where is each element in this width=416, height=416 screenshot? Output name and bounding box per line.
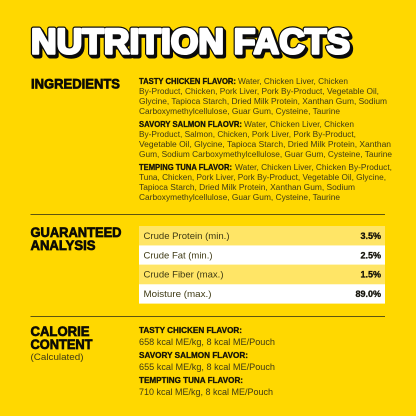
text block: tasty chicken (139, 76, 387, 116)
text block: savory salmon: Water, Chicken Liver, Chicken (244, 119, 354, 129)
row: crude protein: 3.5% (360, 231, 381, 241)
row: moisture: 89.0% (355, 289, 381, 299)
calories: tempting tuna: TEMPTING TUNA FLAVOR: (139, 375, 243, 385)
text block: tasty chicken: TASTY CHICKEN FLAVOR: (139, 76, 236, 86)
text block: temping tuna: Tapioca Starch, Dried Milk Protein, Xanthan Gum, Sodium (139, 182, 355, 192)
row: crude fat (139, 245, 385, 265)
calories: tempting tuna (139, 375, 273, 397)
row: crude fiber (139, 265, 385, 284)
title: NUTRITION FACTS (33, 25, 352, 64)
row: crude fiber: 1.5% (360, 270, 381, 280)
text block: temping tuna: Tuna, Chicken, Pork Liver, Pork By-Product, Vegetable Oil, Glycine, (139, 172, 386, 182)
text block: savory salmon: SAVORY SALMON FLAOVR: (139, 119, 242, 129)
heading: calorie content: CALORIE (30, 324, 90, 339)
text block: tasty chicken: Glycine, Tapioca Starch, Dried Milk Protein, Xanthan Gum, Sodium (139, 96, 387, 106)
text block: tasty chicken: Water, Chicken Liver, Chicken (238, 76, 348, 86)
text block: temping tuna (139, 162, 392, 202)
calories: savory salmon: 655 kcal ME/kg, 8 kcal ME/Pouch (139, 362, 275, 372)
calorie list (139, 325, 275, 397)
text block: tasty chicken: By-Product, Chicken, Pork Liver, Pork By-Product, Vegetable Oil, (139, 86, 379, 96)
heading: calorie content: (Calculated) (30, 351, 84, 362)
heading: ingredients: INGREDIENTS (31, 76, 120, 92)
row: crude protein (139, 226, 385, 245)
calories: tasty chicken (139, 325, 275, 347)
heading: guaranteed analysis: GUARANTEED (30, 225, 122, 240)
row: crude protein: Crude Protein (min.) (144, 231, 230, 241)
heading: calorie content (30, 324, 93, 362)
row: crude fat: Crude Fat (min.) (144, 250, 212, 260)
title: NUTRITION FACTS (31, 22, 350, 62)
text block: savory salmon: Vegetable Oil, Glycine, Tapioca Starch, Dried Milk Protein, Xanthan (139, 139, 391, 149)
text block: temping tuna: TEMPING TUNA FLAVOR: (139, 162, 232, 172)
heading: guaranteed analysis: ANALYSIS (30, 238, 96, 253)
calories: tasty chicken: 658 kcal ME/kg, 8 kcal ME/Pouch (139, 337, 275, 347)
row: moisture: Moisture (max.) (144, 289, 212, 299)
title: NUTRITION FACTS (31, 22, 350, 62)
calories: tempting tuna: 710 kcal ME/kg, 8 kcal ME/Pouch (139, 387, 273, 397)
row: moisture (139, 284, 385, 304)
row: crude fat: 2.5% (360, 250, 381, 260)
text block: temping tuna: Carboxymethylcellulose, Guar Gum, Cysteine, Taurine (139, 192, 340, 202)
title: NUTRITION FACTS (32, 24, 351, 63)
text block: savory salmon: Gum, Sodium Carboxymethylcellulose, Guar Gum, Cysteine, Taurine (139, 149, 392, 159)
text block: tasty chicken: Carboxymethylcellulose, Guar Gum, Cysteine, Taurine (139, 106, 340, 116)
text block: temping tuna: Water, Chicken Liver, Chicken By-Product, (235, 162, 392, 172)
heading: guaranteed analysis (30, 225, 122, 253)
panel: ingredients text (139, 76, 392, 202)
table: guaranteed analysis (139, 226, 385, 304)
text block: savory salmon (139, 119, 392, 159)
calories: savory salmon (139, 350, 275, 372)
text block: savory salmon: By-Product, Salmon, Chicken, Pork Liver, Pork By-Product, (139, 129, 356, 139)
heading: calorie content: CONTENT (30, 337, 93, 352)
row: crude fiber: Crude Fiber (max.) (144, 270, 224, 280)
calories: tasty chicken: TASTY CHICKEN FLAVOR: (139, 325, 242, 335)
calories: savory salmon: SAVORY SALMON FLAVOR: (139, 350, 248, 360)
